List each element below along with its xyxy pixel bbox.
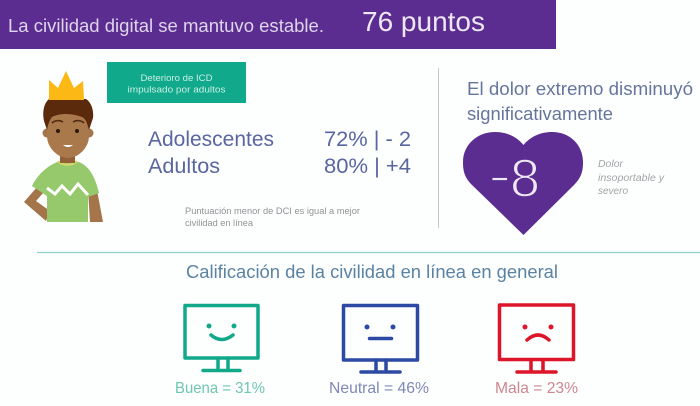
pain note: Dolor [598, 159, 624, 170]
header banner [0, 0, 556, 49]
pain note: severo [598, 186, 628, 197]
stat: teens value: 72% | - 2 [324, 128, 411, 151]
footnote: Puntuación menor de DCI es igual a mejor [185, 206, 360, 216]
heading: extreme pain [467, 78, 693, 124]
stat: adults: Adultos [148, 155, 220, 178]
stat: adults value: 80% | +4 [324, 155, 411, 178]
heading: extreme pain: significativamente [467, 103, 613, 124]
section title: Calificación de la civilidad en línea en general [186, 262, 558, 282]
callout: adult-driven decline [107, 62, 246, 103]
stats table [148, 128, 411, 178]
icon: heart with minus eight [463, 132, 583, 235]
callout: adult-driven decline: impulsado por adultos [128, 84, 226, 94]
icon: bad monitor [500, 305, 574, 372]
label: good: Buena = 31% [175, 380, 265, 397]
icon: heart with minus eight: − [491, 163, 509, 196]
illustration: person with crown [24, 71, 103, 222]
heading: extreme pain: El dolor extremo disminuyó [467, 78, 693, 99]
icon: good monitor [185, 306, 258, 370]
footnote: civilidad en línea [185, 218, 253, 228]
icon: neutral monitor [344, 306, 418, 372]
pain note: insoportable y [598, 173, 665, 184]
icon: heart with minus eight: 8 [510, 148, 540, 208]
header statement: La civilidad digital se mantuvo estable. [8, 16, 324, 36]
callout: adult-driven decline: Deterioro de ICD [140, 73, 213, 83]
label: bad: Mala = 23% [495, 380, 578, 397]
pain note [598, 159, 665, 197]
footnote [185, 206, 360, 228]
label: neutral: Neutral = 46% [329, 380, 429, 397]
header score: 76 puntos [362, 6, 485, 37]
stat: teens: Adolescentes [148, 128, 274, 151]
